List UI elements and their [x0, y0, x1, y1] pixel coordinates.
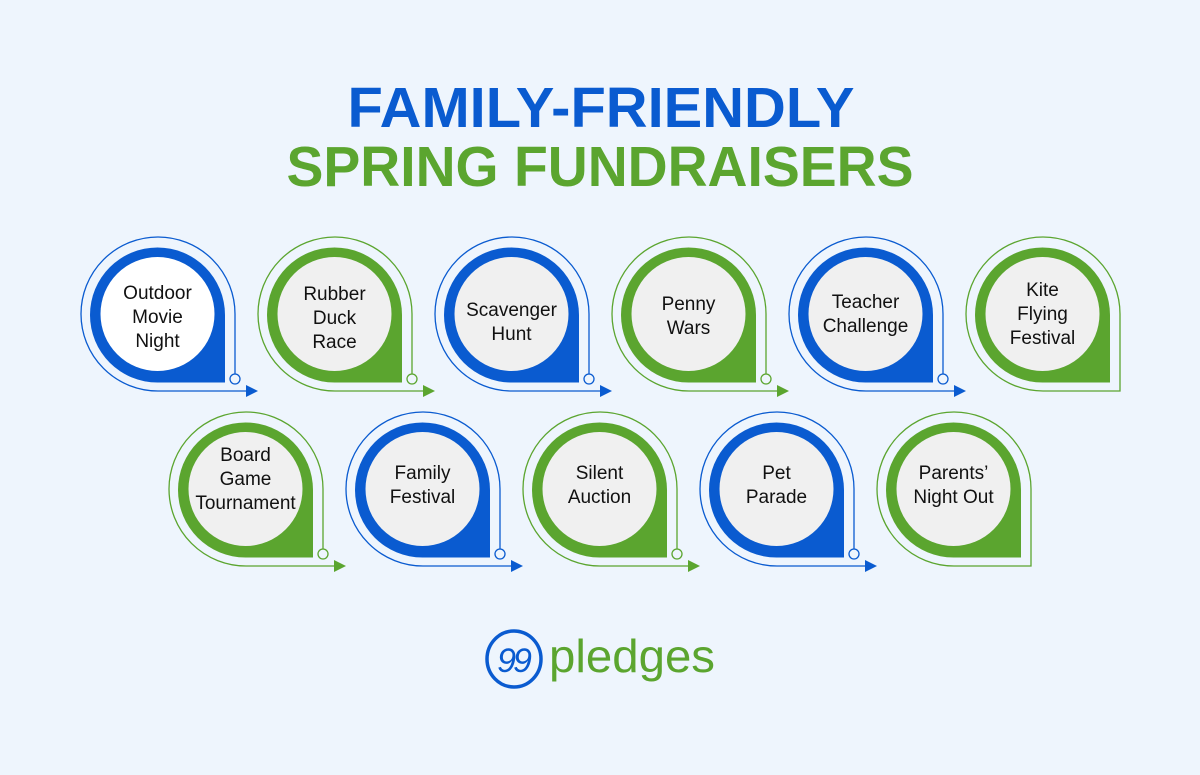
item: Penny Wars: Penny — [662, 294, 716, 315]
item: Teacher Challenge: Challenge — [823, 316, 908, 337]
item: Scavenger Hunt — [435, 237, 612, 397]
item: Teacher Challenge — [789, 237, 966, 397]
item: Kite Flying Festival: Kite — [1026, 280, 1059, 301]
item: Pet Parade — [700, 412, 877, 572]
item: Penny Wars — [612, 237, 789, 397]
item: Family Festival: Family — [395, 463, 451, 484]
item: Silent Auction: Auction — [568, 487, 631, 508]
item: Outdoor Movie Night — [81, 237, 258, 397]
logo: 99pledges: pledges — [549, 630, 715, 682]
item: Rubber Duck Race: Rubber — [303, 284, 366, 305]
item: Outdoor Movie Night: Movie — [132, 307, 183, 328]
item: Penny Wars: Wars — [667, 318, 710, 339]
item: Pet Parade: Pet — [762, 463, 791, 484]
item: Teacher Challenge: Teacher — [832, 292, 900, 313]
item: Kite Flying Festival: Festival — [1010, 328, 1075, 349]
logo: 99pledges: 99 — [497, 642, 532, 680]
item: Outdoor Movie Night: Night — [135, 331, 180, 352]
item: Board Game Tournament: Game — [220, 469, 271, 490]
item: Rubber Duck Race: Race — [312, 332, 357, 353]
item: Board Game Tournament: Tournament — [195, 493, 296, 514]
item: Family Festival: Festival — [390, 487, 455, 508]
item: Family Festival — [346, 412, 523, 572]
item: Scavenger Hunt: Hunt — [491, 324, 532, 345]
item: Scavenger Hunt: Scavenger — [466, 300, 558, 321]
item: Parents' Night Out: Parents’ — [919, 463, 988, 484]
item: Silent Auction: Silent — [576, 463, 624, 484]
item: Parents' Night Out — [877, 412, 1031, 566]
item: Rubber Duck Race — [258, 237, 435, 397]
item: Parents' Night Out: Night Out — [913, 487, 994, 508]
item: Board Game Tournament — [169, 412, 346, 572]
item: Rubber Duck Race: Duck — [313, 308, 357, 329]
item: Board Game Tournament: Board — [220, 445, 271, 466]
title: FAMILY-FRIENDLY — [348, 76, 854, 140]
title: SPRING FUNDRAISERS — [286, 135, 914, 199]
item: Kite Flying Festival — [966, 237, 1120, 391]
item: Kite Flying Festival: Flying — [1017, 304, 1068, 325]
item: Outdoor Movie Night: Outdoor — [123, 283, 192, 304]
item: Pet Parade: Parade — [746, 487, 807, 508]
logo: 99pledges — [487, 630, 715, 687]
item: Silent Auction — [523, 412, 700, 572]
title — [286, 76, 914, 199]
